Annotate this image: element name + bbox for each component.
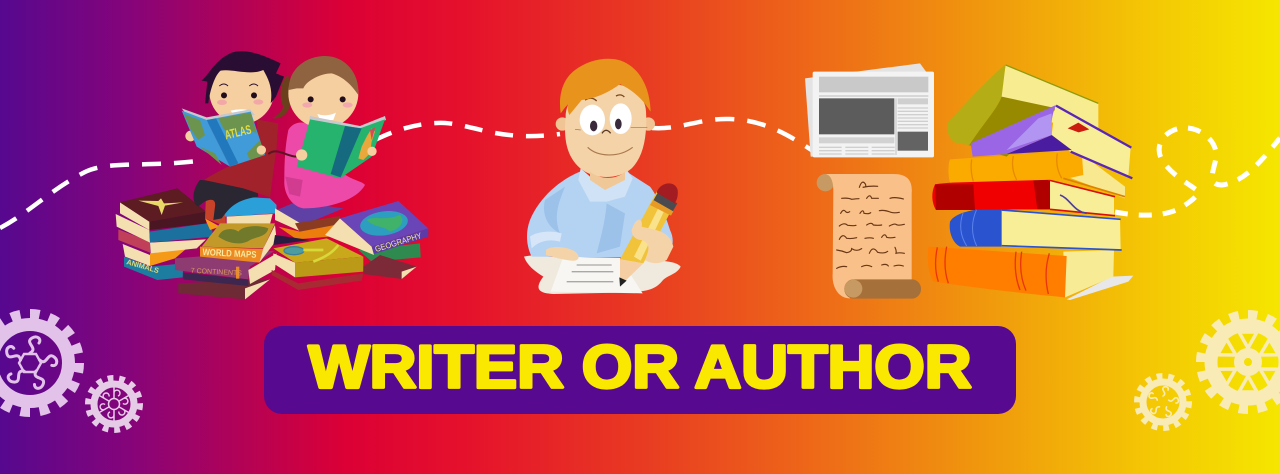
newspaper (805, 63, 934, 157)
book pile: right stack: GEOGRAPHY (374, 230, 423, 254)
red book (932, 179, 1115, 216)
gear: small bottom-left (88, 378, 140, 430)
left hand (546, 247, 579, 261)
desk shadow shape (524, 255, 681, 294)
book stack (928, 64, 1133, 300)
illustration: children reading on a pile of books (116, 51, 428, 299)
pencil in hand (619, 183, 678, 287)
title banner (264, 326, 1016, 414)
book pile: middle stack: 7 CONTINENTS (191, 268, 242, 277)
blue shirt (527, 168, 673, 260)
book pile: middle stack: WORLD MAPS (202, 247, 257, 260)
dashed path: centre-right section (652, 119, 813, 151)
girl: head (273, 56, 358, 128)
boy: head (202, 51, 284, 124)
illustration: newspaper, scroll and stack of books (805, 63, 1133, 300)
manuscript scroll (817, 174, 921, 299)
orange hair (560, 59, 651, 115)
title text: WRITER OR AUTHOR (308, 334, 972, 400)
gear: large bottom-left (0, 314, 79, 412)
dashed path: centre-left section (375, 123, 560, 140)
book pile: middle stack (175, 195, 277, 299)
girl: pink dress (284, 123, 365, 208)
book pile: left stack (116, 188, 213, 280)
olive book (947, 64, 1098, 157)
dashed path: looping right section (1115, 128, 1280, 215)
orange-yellow book (948, 151, 1125, 198)
purple book (971, 105, 1132, 178)
arm link between the children (268, 151, 297, 157)
blue book (950, 208, 1122, 250)
dashed path: left section (0, 160, 205, 228)
book: atlas held by boy: ATLAS (224, 123, 253, 142)
book: atlas held by boy (182, 108, 266, 167)
writing paper (551, 257, 643, 293)
gear: large bottom-right (1200, 314, 1280, 410)
bottom orange book (928, 247, 1133, 300)
boy: legs and dress (194, 119, 278, 220)
book pile: right stack (272, 201, 428, 290)
illustration: boy writing with a pencil (524, 59, 681, 294)
book: green storybook held by girl (296, 116, 386, 178)
head and face (556, 84, 655, 190)
gear: small bottom-right (1137, 376, 1189, 428)
book pile: left stack: ANIMALS (125, 257, 160, 275)
